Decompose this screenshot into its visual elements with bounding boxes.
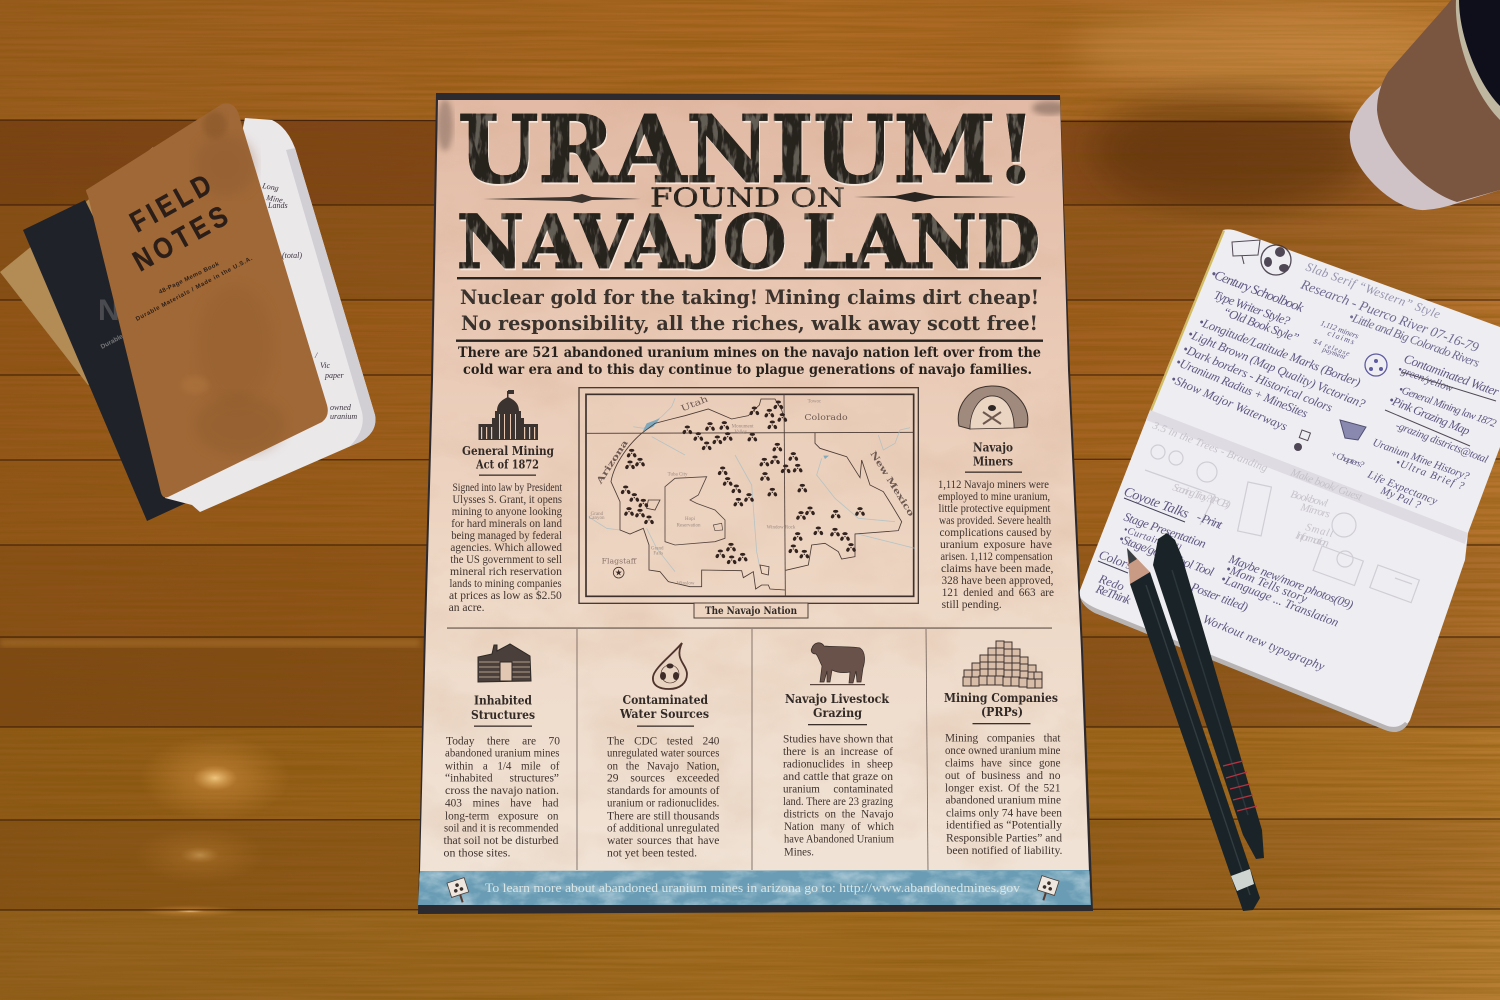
handwritten notes top page: claims: [1326, 328, 1356, 346]
open sketch notebook: [1080, 229, 1500, 732]
panel: navajo livestock grazing: [783, 643, 894, 858]
panel: contaminated water sources: of additional unregulated: [607, 823, 720, 835]
handwritten notes top page: •General Mining law 1872: [1397, 384, 1498, 430]
handwritten notes bottom page: Small: [1304, 521, 1334, 540]
white grid notebook pages: (total): [282, 251, 302, 260]
panel: navajo livestock grazing: and cattle that graze on: [783, 771, 893, 783]
chart: navajo nation uranium mine map: Hopi: [685, 517, 696, 522]
hopi reservation: [665, 477, 725, 545]
handwritten notes top page: •green/yellow: [1396, 364, 1455, 395]
panel: general mining act: an acre.: [449, 602, 485, 614]
panel: contaminated water sources: water sources that have: [607, 835, 719, 847]
white grid notebook pages: [165, 118, 375, 512]
black notebook: [23, 200, 225, 521]
handwritten notes top page: “Old Book Style”: [1221, 305, 1301, 345]
handwritten notes top page: Life Expectancy: [1365, 468, 1439, 508]
black notebook: N: [98, 294, 120, 327]
handwritten notes top page: •Little and Big Colorado Rivers: [1347, 310, 1482, 370]
panel: general mining act: [449, 443, 563, 614]
white grid notebook pages: Lands: [267, 201, 288, 210]
panel: mining companies: claims have since gone: [945, 757, 1060, 769]
white grid notebook pages: Long: [261, 181, 279, 193]
panel: general mining act: mining to anyone looking: [452, 506, 562, 518]
white grid notebook pages: /: [314, 351, 318, 360]
panel: mining companies: out of business and no: [945, 770, 1061, 782]
panel: contaminated water sources: unregulated water sources: [607, 748, 720, 760]
panel: contaminated water sources: There are still thousands: [607, 810, 720, 822]
panel: general mining act: mineral rich reservation: [450, 566, 562, 578]
tagline: Nuclear gold for the taking! Mining claims dirt cheap!: [460, 285, 1039, 309]
pencil: [1127, 548, 1260, 911]
field notes title: FIELD: [124, 168, 217, 239]
stack of field notes notebooks: [0, 103, 375, 521]
handwritten notes bottom page: Colors: [1097, 547, 1134, 572]
handwritten notes top page: 1,112 miners: [1319, 318, 1360, 341]
title: NAVAJO LAND: [457, 198, 1040, 286]
panel: mining companies: Mining Companies: [944, 690, 1058, 705]
handwritten notes bottom page: •Stage/gone Wool Tool: [1117, 532, 1216, 579]
panel: inhabited structures: on those sites.: [444, 848, 511, 860]
chart: navajo nation uranium mine map: Canyon: [589, 516, 605, 521]
flagstaff star marker: [613, 567, 624, 579]
handwritten notes bottom page: [1093, 419, 1419, 674]
panel: mining companies: abandoned uranium mine: [946, 795, 1061, 807]
black notebook: Durable: [100, 333, 125, 351]
title: NAVAJO LAND: [458, 200, 1041, 288]
panel: contaminated water sources: [607, 643, 720, 860]
panel: contaminated water sources: standards for amounts of: [607, 785, 720, 797]
handwritten notes bottom page: Mirrors: [1298, 501, 1331, 521]
panel: contaminated water sources: Contaminated: [622, 692, 708, 707]
field notes title: Durable Materials / Made in the U.S.A.: [135, 256, 254, 323]
panel: general mining act: for hard minerals on land: [451, 518, 562, 530]
handwritten notes bottom page: Redo: [1096, 571, 1126, 594]
panel: inhabited structures: long-term exposure on: [445, 810, 559, 822]
chart: navajo nation uranium mine map: Towoc: [808, 399, 822, 404]
panel: inhabited structures: soil and it is recommended: [444, 823, 559, 835]
handwritten notes top page: •Century Schoolbook: [1209, 266, 1307, 315]
handwritten notes top page: •Dark borders - Historical colors: [1181, 342, 1335, 415]
panel: navajo livestock grazing: have Abandoned Uranium: [784, 833, 894, 845]
panel: navajo miners: employed to mine uranium,: [938, 491, 1050, 503]
panel: general mining act: the US government to sell: [450, 554, 562, 566]
panel: navajo miners: arisen. 1,112 compensation: [940, 551, 1053, 563]
handwritten notes bottom page: •Mom Tells story: [1224, 562, 1310, 606]
handwritten notes bottom page: Information: [1293, 529, 1331, 550]
chart: navajo nation uranium mine map: Grand: [591, 512, 604, 517]
icon: pile of ore blocks: [963, 641, 1042, 688]
panel: navajo livestock grazing: land. There are 23 grazing: [783, 796, 893, 808]
panel: inhabited structures: Today there are 70: [446, 735, 560, 747]
panel: navajo miners: was provided. Severe health: [939, 515, 1051, 527]
panel: general mining act: Signed into law by President: [452, 482, 563, 494]
intro text: [458, 345, 1041, 378]
chart: navajo nation uranium mine map: Tuba City: [668, 473, 688, 478]
panel: navajo livestock grazing: radionuclides in sheep: [783, 758, 893, 770]
panel: inhabited structures: within a 1/4 mile of: [445, 760, 560, 772]
map labels: Arizona: [594, 438, 631, 487]
title: [457, 96, 1041, 288]
intro text: There are 521 abandoned uranium mines on the navajo nation left over from the: [458, 345, 1041, 361]
panel: navajo livestock grazing: Navajo Livestock: [785, 691, 889, 706]
icon: left signpost: [447, 878, 471, 905]
chart: navajo nation uranium mine map: Winslow: [677, 581, 695, 586]
handwritten notes top page: -grazing districts@total: [1394, 420, 1490, 466]
panel: navajo miners: complications caused by: [940, 527, 1052, 539]
panel: navajo miners: 121 denied and 663 are: [942, 587, 1054, 599]
handwritten notes top page: Contaminated Water: [1402, 351, 1500, 399]
panel: mining companies: identified as “Potentially: [946, 820, 1062, 832]
panel: general mining act: lands to mining companies: [450, 578, 562, 590]
panel: inhabited structures: “inhabited structures”: [445, 773, 559, 785]
chart: navajo nation uranium mine map: Grand: [651, 547, 664, 552]
panel: general mining act: at prices as low as $2.50: [449, 590, 562, 602]
handwritten notes top page: Research - Puerco River 07-16-79: [1298, 277, 1480, 356]
handwritten notes top page: •Uranium Radius + MineSites: [1174, 355, 1310, 421]
panel: navajo miners: uranium exposure have: [940, 539, 1052, 551]
handwritten notes bottom page: Make book/ Guest: [1288, 466, 1364, 504]
handwritten notes top page: Type Writer Style?: [1212, 288, 1293, 328]
panel: contaminated water sources: 29 sources exceeded: [607, 773, 720, 785]
panel: general mining act: Act of 1872: [475, 456, 539, 472]
handwritten notes bottom page: •Language ... Translation: [1219, 572, 1341, 630]
icon: capitol building: [478, 390, 538, 440]
panel: inhabited structures: Structures: [471, 707, 535, 722]
panel: navajo livestock grazing: Studies have shown that: [783, 734, 894, 746]
map caption: The Navajo Nation: [705, 605, 797, 617]
icon: sheep: [810, 643, 865, 685]
handwritten notes top page: •Ultra Brief ?: [1394, 457, 1466, 493]
panel: navajo livestock grazing: districts on the Navajo: [784, 808, 894, 820]
panel: mining companies: (PRPs): [981, 704, 1023, 719]
handwritten notes top page: Slab Serif “Western” Style: [1304, 260, 1443, 322]
intro text: cold war era and to this day continue to plague generations of navajo families.: [463, 362, 1032, 378]
panel: navajo miners: little protective equipment: [938, 503, 1051, 515]
white grid notebook pages: contract: [222, 445, 251, 464]
handwritten notes bottom page: Scoring Tray? (PCB): [1171, 481, 1232, 511]
white grid notebook pages: owned: [330, 403, 352, 412]
panel: navajo miners: claims have been made,: [941, 563, 1054, 575]
panel: mining companies: Responsible Parties” and: [946, 832, 1062, 844]
handwritten notes bottom page: Workout new typography: [1201, 612, 1327, 674]
panel: general mining act: Ulysses S. Grant, it opens: [452, 494, 563, 506]
chart: navajo nation uranium mine map: Monument: [732, 425, 754, 430]
map labels: New Mexico: [867, 450, 916, 519]
map labels: Colorado: [804, 413, 848, 423]
panel: contaminated water sources: Water Sources: [619, 706, 709, 721]
rivers: [588, 398, 915, 572]
tagline: No responsibility, all the riches, walk away scott free!: [461, 311, 1038, 335]
panel: inhabited structures: 403 mines have had: [445, 798, 559, 810]
handwritten notes bottom page: ReThink: [1093, 581, 1133, 607]
chart: navajo nation uranium mine map: Falls: [653, 551, 663, 556]
panel: mining companies: claims only 74 have been: [946, 807, 1062, 819]
panel: navajo livestock grazing: uranium contaminated: [783, 783, 893, 795]
panel: contaminated water sources: not yet been tested.: [607, 848, 697, 860]
white grid notebook pages: uranium: [330, 412, 357, 421]
handwritten notes top page: •Light Brown (Map Quality) Victorian?: [1186, 327, 1368, 411]
chart: navajo nation uranium mine map: Reservation: [677, 523, 701, 528]
field notes brown cover: [86, 103, 328, 497]
handwritten notes top page: + Chapters?: [1329, 448, 1366, 470]
panel: general mining act: General Mining: [462, 443, 554, 458]
field notes title: [124, 168, 254, 323]
panel: contaminated water sources: uranium or radionuclides.: [607, 798, 720, 810]
panel: inhabited structures: Inhabited: [474, 692, 532, 708]
handwritten notes bottom page: Coyote Talks: [1122, 485, 1191, 522]
icon: mine entrance with skull: [958, 386, 1028, 429]
panel: inhabited structures: abandoned uranium mines: [445, 748, 560, 760]
panel: general mining act: agencies. Which allowed: [450, 542, 562, 554]
field notes title: 48-Page Memo Book: [158, 261, 221, 296]
handwritten notes bottom page: Poster titled): [1188, 579, 1250, 614]
panel: mining companies: Mining companies that: [945, 733, 1061, 745]
handwritten notes bottom page: Stage Presentation: [1122, 510, 1208, 551]
handwritten notes bottom page: 3.5 in the Trees - Branding: [1150, 419, 1270, 475]
handwritten notes bottom page: •Curtain Wall: [1122, 524, 1183, 554]
panel: inhabited structures: that soil not be disturbed: [444, 835, 559, 847]
title: URANIUM!: [459, 98, 1037, 206]
title: FOUND ON: [650, 184, 845, 214]
white grid notebook pages: Vic: [320, 361, 331, 370]
icon: water drop with radiation: [653, 643, 687, 689]
handwritten notes top page: $4 release: [1312, 337, 1351, 358]
footer banner: To learn more about abandoned uranium mines in arizona go to: http://www.abandonedmines.gov: [485, 880, 1021, 895]
icon: cabin: [478, 644, 531, 682]
handwritten notes top page: payment: [1320, 345, 1348, 361]
chart: navajo nation uranium mine map: [579, 388, 918, 603]
uranium mine markers: [620, 400, 865, 565]
handwritten notes top page: [1169, 240, 1500, 512]
panel: navajo livestock grazing: there is an increase of: [783, 746, 893, 758]
panel: navajo miners: [938, 440, 1054, 611]
panel: general mining act: being managed by federal: [451, 530, 562, 542]
map labels: [594, 394, 916, 566]
panel: navajo miners: 328 have been approved,: [942, 575, 1054, 587]
panel: mining companies: longer exist. Of the 521: [945, 782, 1061, 794]
white grid notebook pages: paper: [324, 371, 345, 380]
chart: navajo nation uranium mine map: Valley: [734, 430, 748, 435]
panel: contaminated water sources: on the Navajo Nation,: [607, 760, 720, 772]
panel: mining companies: once owned uranium mine: [945, 745, 1060, 757]
chart: navajo nation uranium mine map: Window Rock: [767, 526, 796, 531]
handwritten notes bottom page: - Print: [1195, 510, 1225, 532]
panel: inhabited structures: [444, 644, 560, 860]
handwritten notes top page: My Pal ?: [1378, 484, 1423, 512]
footer banner: [418, 870, 1091, 905]
handwritten notes bottom page: Maybe new/more photos(09): [1226, 551, 1355, 612]
panel: navajo miners: 1,112 Navajo miners were: [938, 479, 1049, 491]
kraft notebook: [0, 147, 230, 385]
handwritten notes top page: Uranium Mine History?: [1371, 437, 1471, 483]
poster: uranium found on navajo land: [415, 93, 1095, 914]
handwritten notes bottom page: Bookbowl: [1289, 488, 1329, 510]
panel: mining companies: [944, 641, 1063, 857]
handwritten notes top page: •Pink Grazing Map: [1387, 393, 1472, 438]
panel: navajo miners: Navajo: [973, 440, 1013, 454]
map labels: Utah: [680, 394, 710, 414]
panel: navajo miners: Miners: [973, 454, 1013, 468]
handwritten notes top page: •Show Major Waterways: [1169, 372, 1289, 434]
panel: contaminated water sources: The CDC tested 240: [607, 735, 720, 747]
nation boundary: [611, 399, 902, 590]
coffee cup: [1350, 0, 1500, 210]
pen with red bands: [1153, 533, 1264, 859]
tagline: [460, 285, 1039, 335]
white grid notebook pages: Mine: [265, 193, 284, 205]
icon: right signpost: [1035, 876, 1059, 903]
handwritten notes top page: •Longitude/Latitude Marks (Border): [1197, 315, 1363, 389]
panel: navajo livestock grazing: Grazing: [813, 705, 862, 720]
title: URANIUM!: [458, 96, 1036, 204]
panel: mining companies: been notified of liability.: [946, 845, 1063, 857]
panel: inhabited structures: cross the navajo nation.: [445, 785, 559, 797]
panel: navajo livestock grazing: Nation many of which: [784, 821, 894, 833]
map labels: Flagstaff: [602, 557, 637, 566]
panel: navajo miners: still pending.: [942, 599, 1002, 611]
field notes title: NOTES: [127, 200, 233, 278]
panel: navajo livestock grazing: Mines.: [784, 846, 814, 858]
flagstaff star marker: ★: [615, 569, 623, 579]
map caption: [694, 603, 808, 618]
